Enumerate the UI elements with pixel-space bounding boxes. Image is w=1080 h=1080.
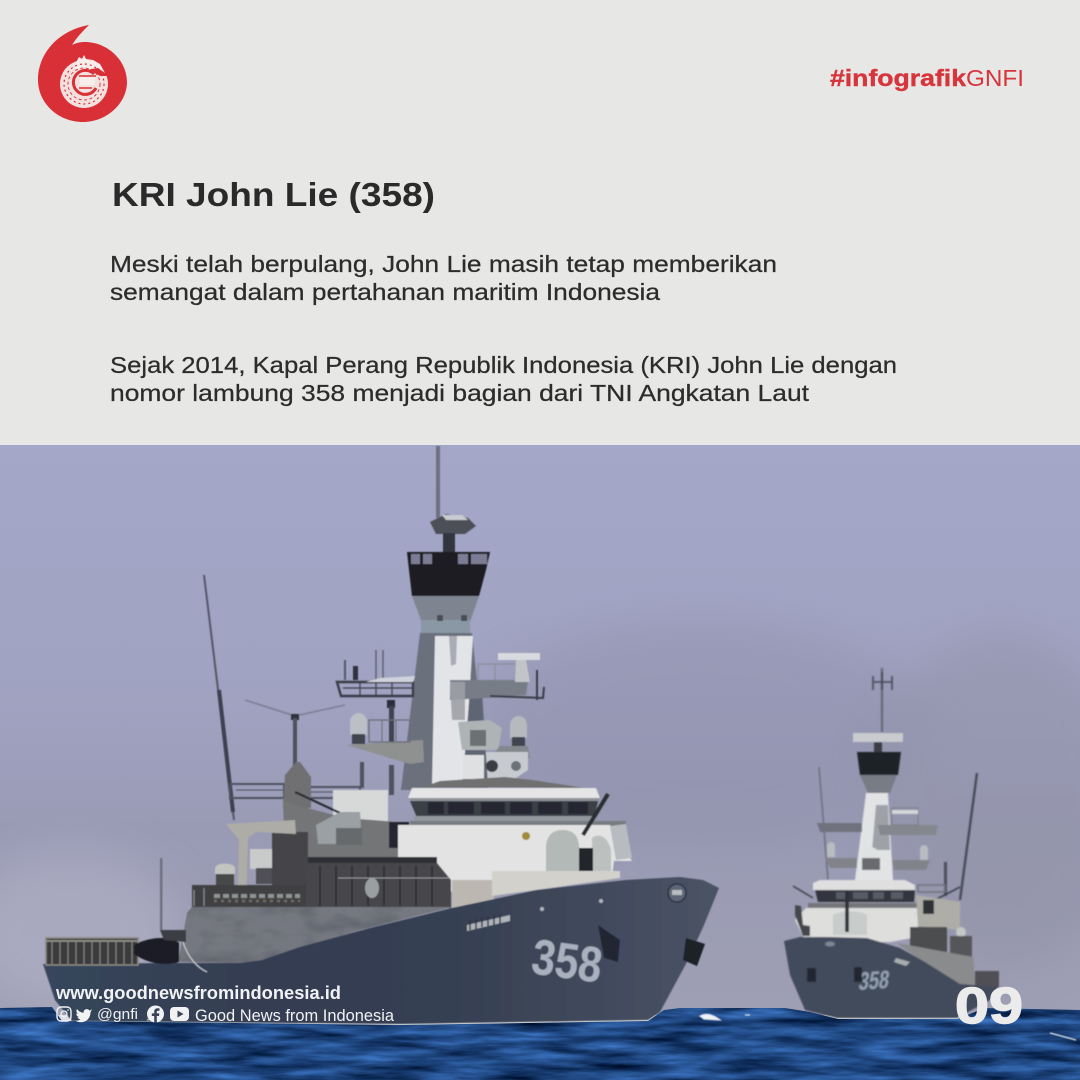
- hashtag label: #infografik: [830, 65, 966, 91]
- hull details: [467, 884, 705, 966]
- aft superstructure and hangar: [192, 762, 409, 909]
- hashtag label: GNFI: [966, 65, 1024, 91]
- handle: @gnfi: [97, 1006, 138, 1023]
- tower: [817, 733, 938, 880]
- logo: GNFI red swirl with garuda G: [38, 25, 127, 122]
- social media row: [57, 1006, 395, 1025]
- page number: 09: [955, 977, 1023, 1034]
- hull dark: [43, 877, 719, 1024]
- text block: intro: Meski telah berpulang, John Lie masih tetap memberikan: [110, 251, 777, 277]
- bridge and deckhouse: [793, 880, 972, 958]
- website url: www.goodnewsfromindonesia.id: [55, 983, 341, 1003]
- bridge: [408, 777, 626, 826]
- text block: since 2014: Sejak 2014, Kapal Perang Republik Indonesia (KRI) John Lie dengan: [110, 352, 897, 378]
- mast platforms: [337, 650, 544, 795]
- text block: since 2014: nomor lambung 358 menjadi bagian dari TNI Angkatan Laut: [110, 380, 810, 406]
- stern rail: [46, 858, 207, 972]
- title: KRI John Lie (358): [112, 176, 435, 213]
- icon: youtube: [170, 1007, 189, 1021]
- text block: intro: [110, 251, 777, 305]
- sea: [0, 1007, 1080, 1080]
- main mast antennas: [204, 575, 360, 820]
- masts: [819, 668, 977, 900]
- hull dark: [784, 937, 998, 1018]
- hashtag label: [830, 65, 1024, 91]
- icon: twitter: [76, 1009, 92, 1022]
- text block: since 2014: [110, 352, 897, 406]
- hull grey side: [178, 907, 452, 963]
- main white deckhouse: [305, 794, 632, 908]
- icon: facebook: [147, 1006, 164, 1022]
- ship: KRI 358 foreground: [43, 446, 719, 1024]
- photo: warships at sea: [0, 445, 1080, 1080]
- hull details: [807, 942, 910, 982]
- sky: [0, 445, 1080, 1015]
- hull number 358: 358: [528, 928, 606, 994]
- text block: intro: semangat dalam pertahanan maritim Indonesia: [110, 279, 661, 305]
- ship: second frigate background: [784, 668, 999, 1018]
- icon: instagram: [57, 1007, 71, 1021]
- hull number: 358: [857, 966, 891, 996]
- hull side grey: [897, 943, 976, 986]
- page name: Good News from Indonesia: [195, 1006, 395, 1025]
- background panel: [0, 0, 1080, 445]
- tower: [401, 446, 490, 790]
